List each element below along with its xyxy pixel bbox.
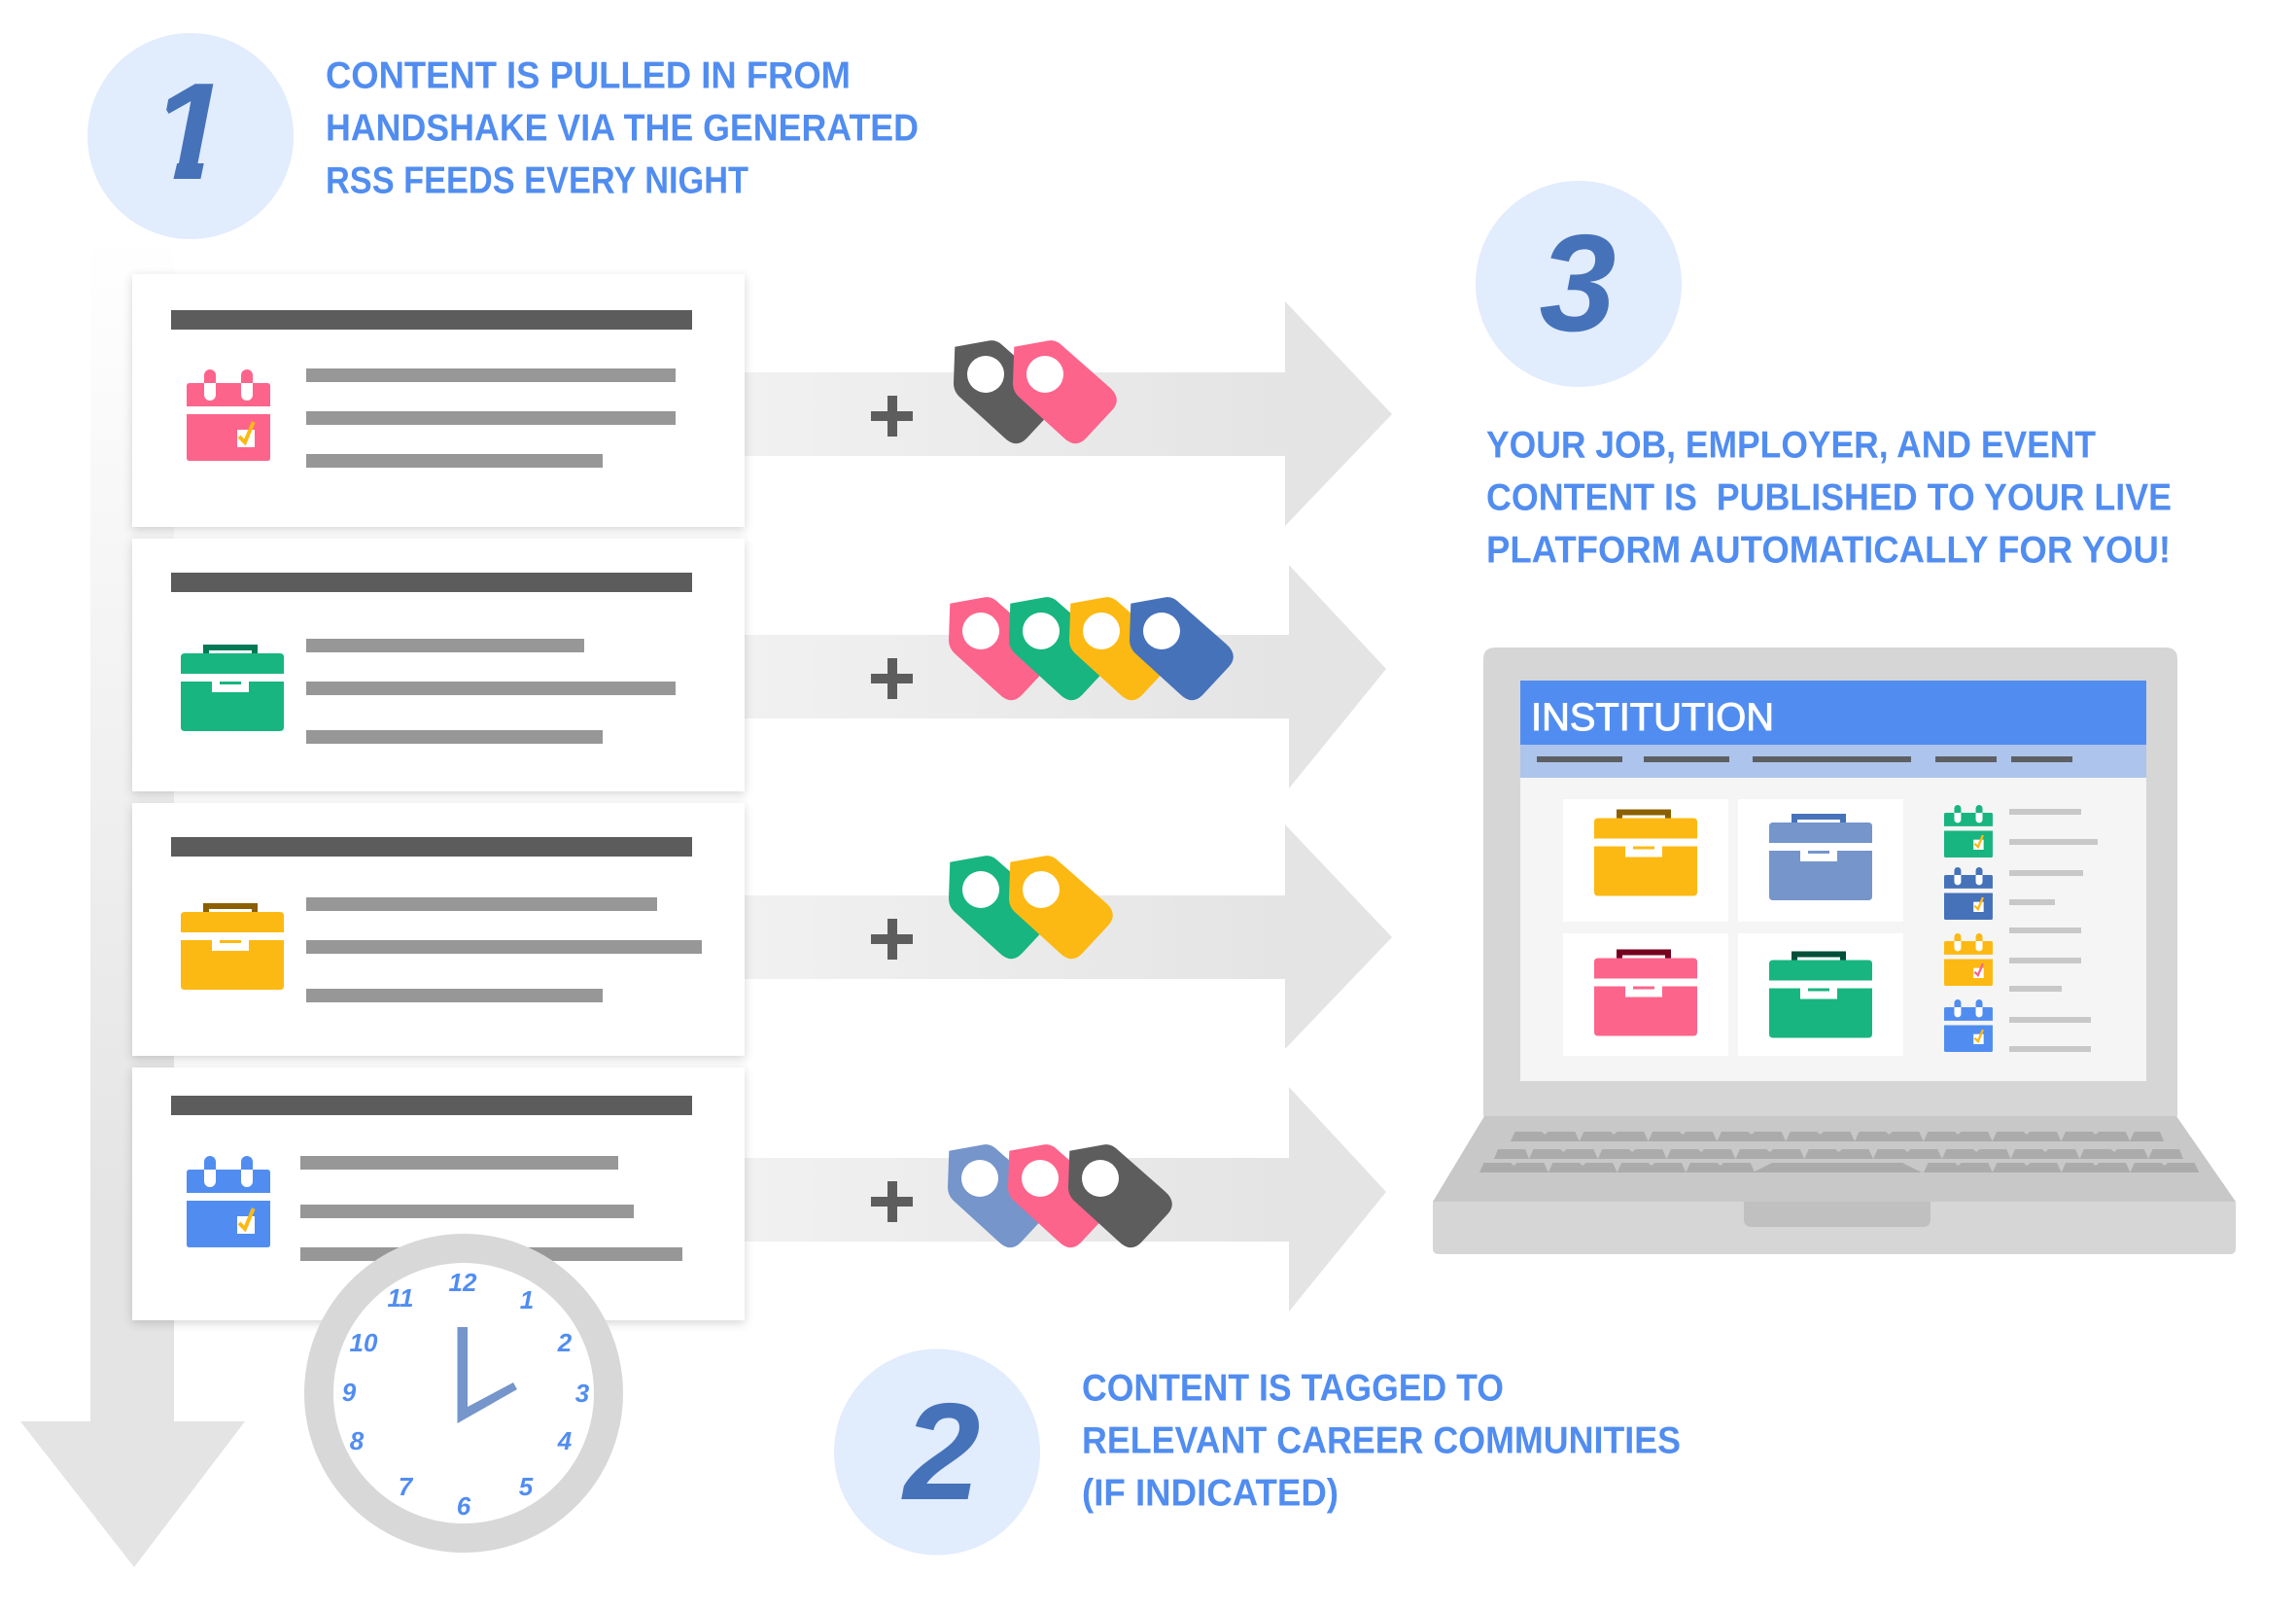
arrow row 4 [745,1087,1386,1312]
step 2 text: (IF INDICATED) [1082,1472,1339,1515]
clock: 3 [575,1379,590,1408]
laptop [1433,648,2236,1254]
sidebar text lines [2009,809,2098,1052]
card 2: employer [132,539,745,791]
vertical timeline arrow [20,233,245,1567]
arrow row 2 [745,565,1386,788]
step 1 text: RSS FEEDS EVERY NIGHT [326,159,748,202]
arrow row 3 [745,824,1392,1049]
site header: INSTITUTION [1531,696,1774,739]
clock: 5 [519,1472,534,1501]
laptop lid [1483,648,2177,1116]
step 2 number badge: 2 [901,1375,980,1529]
plus and tags row 2 [871,597,1234,700]
laptop deck [1433,1116,2236,1202]
clock: 8 [350,1426,365,1455]
step 2 number badge [834,1349,1040,1556]
clock: 2 [557,1328,573,1357]
card 3: job [132,803,745,1056]
step 1 text: HANDSHAKE VIA THE GENERATED [326,107,919,150]
step 2 text [1082,1367,1681,1515]
card 4: event [132,1068,745,1320]
clock: 7 [399,1472,414,1501]
step 1 number badge [87,33,294,239]
clock: 11 [387,1283,414,1312]
step 3 text: YOUR JOB, EMPLOYER, AND EVENT [1486,424,2096,467]
icon: yellow briefcase [181,903,284,990]
keyboard [1479,1132,2199,1172]
tile: blue job [1738,799,1903,922]
tile: yellow job [1563,799,1728,922]
clock [319,1248,609,1538]
clock: 6 [457,1491,471,1521]
plus and tags row 3 [871,856,1113,960]
site header [1520,681,2146,745]
icon: green briefcase [181,645,284,731]
plus and tags row 1 [871,340,1117,443]
clock: 9 [342,1378,357,1407]
arrow row 1 [745,301,1392,526]
step 3 text: PLATFORM AUTOMATICALLY FOR YOU! [1486,529,2171,572]
clock: 12 [449,1268,477,1297]
step 3 text: CONTENT IS PUBLISHED TO YOUR LIVE [1486,476,2172,519]
plus and tags row 4 [871,1144,1172,1247]
sidebar calendars [1944,805,1993,1052]
clock: 1 [520,1285,534,1314]
card 1: event [132,274,745,527]
clock: 4 [557,1426,573,1455]
trackpad notch [1744,1202,1931,1227]
step 3 number badge [1476,181,1682,387]
step 1 text: CONTENT IS PULLED IN FROM [326,54,851,97]
step 3 text [1486,424,2172,572]
clock: 10 [350,1328,378,1357]
step 2 text: RELEVANT CAREER COMMUNITIES [1082,1419,1681,1462]
tile: green job [1738,933,1903,1056]
icon: blue calendar [187,1156,270,1247]
step 1 number badge: 1 [151,54,226,209]
laptop front edge [1433,1202,2236,1254]
step 3 number badge: 3 [1540,206,1616,361]
tile: pink job [1563,933,1728,1056]
icon: pink calendar [187,369,270,461]
site navigation [1520,745,2146,778]
laptop screen [1520,681,2146,1081]
step 2 text: CONTENT IS TAGGED TO [1082,1367,1504,1410]
step 1 text [326,54,919,202]
